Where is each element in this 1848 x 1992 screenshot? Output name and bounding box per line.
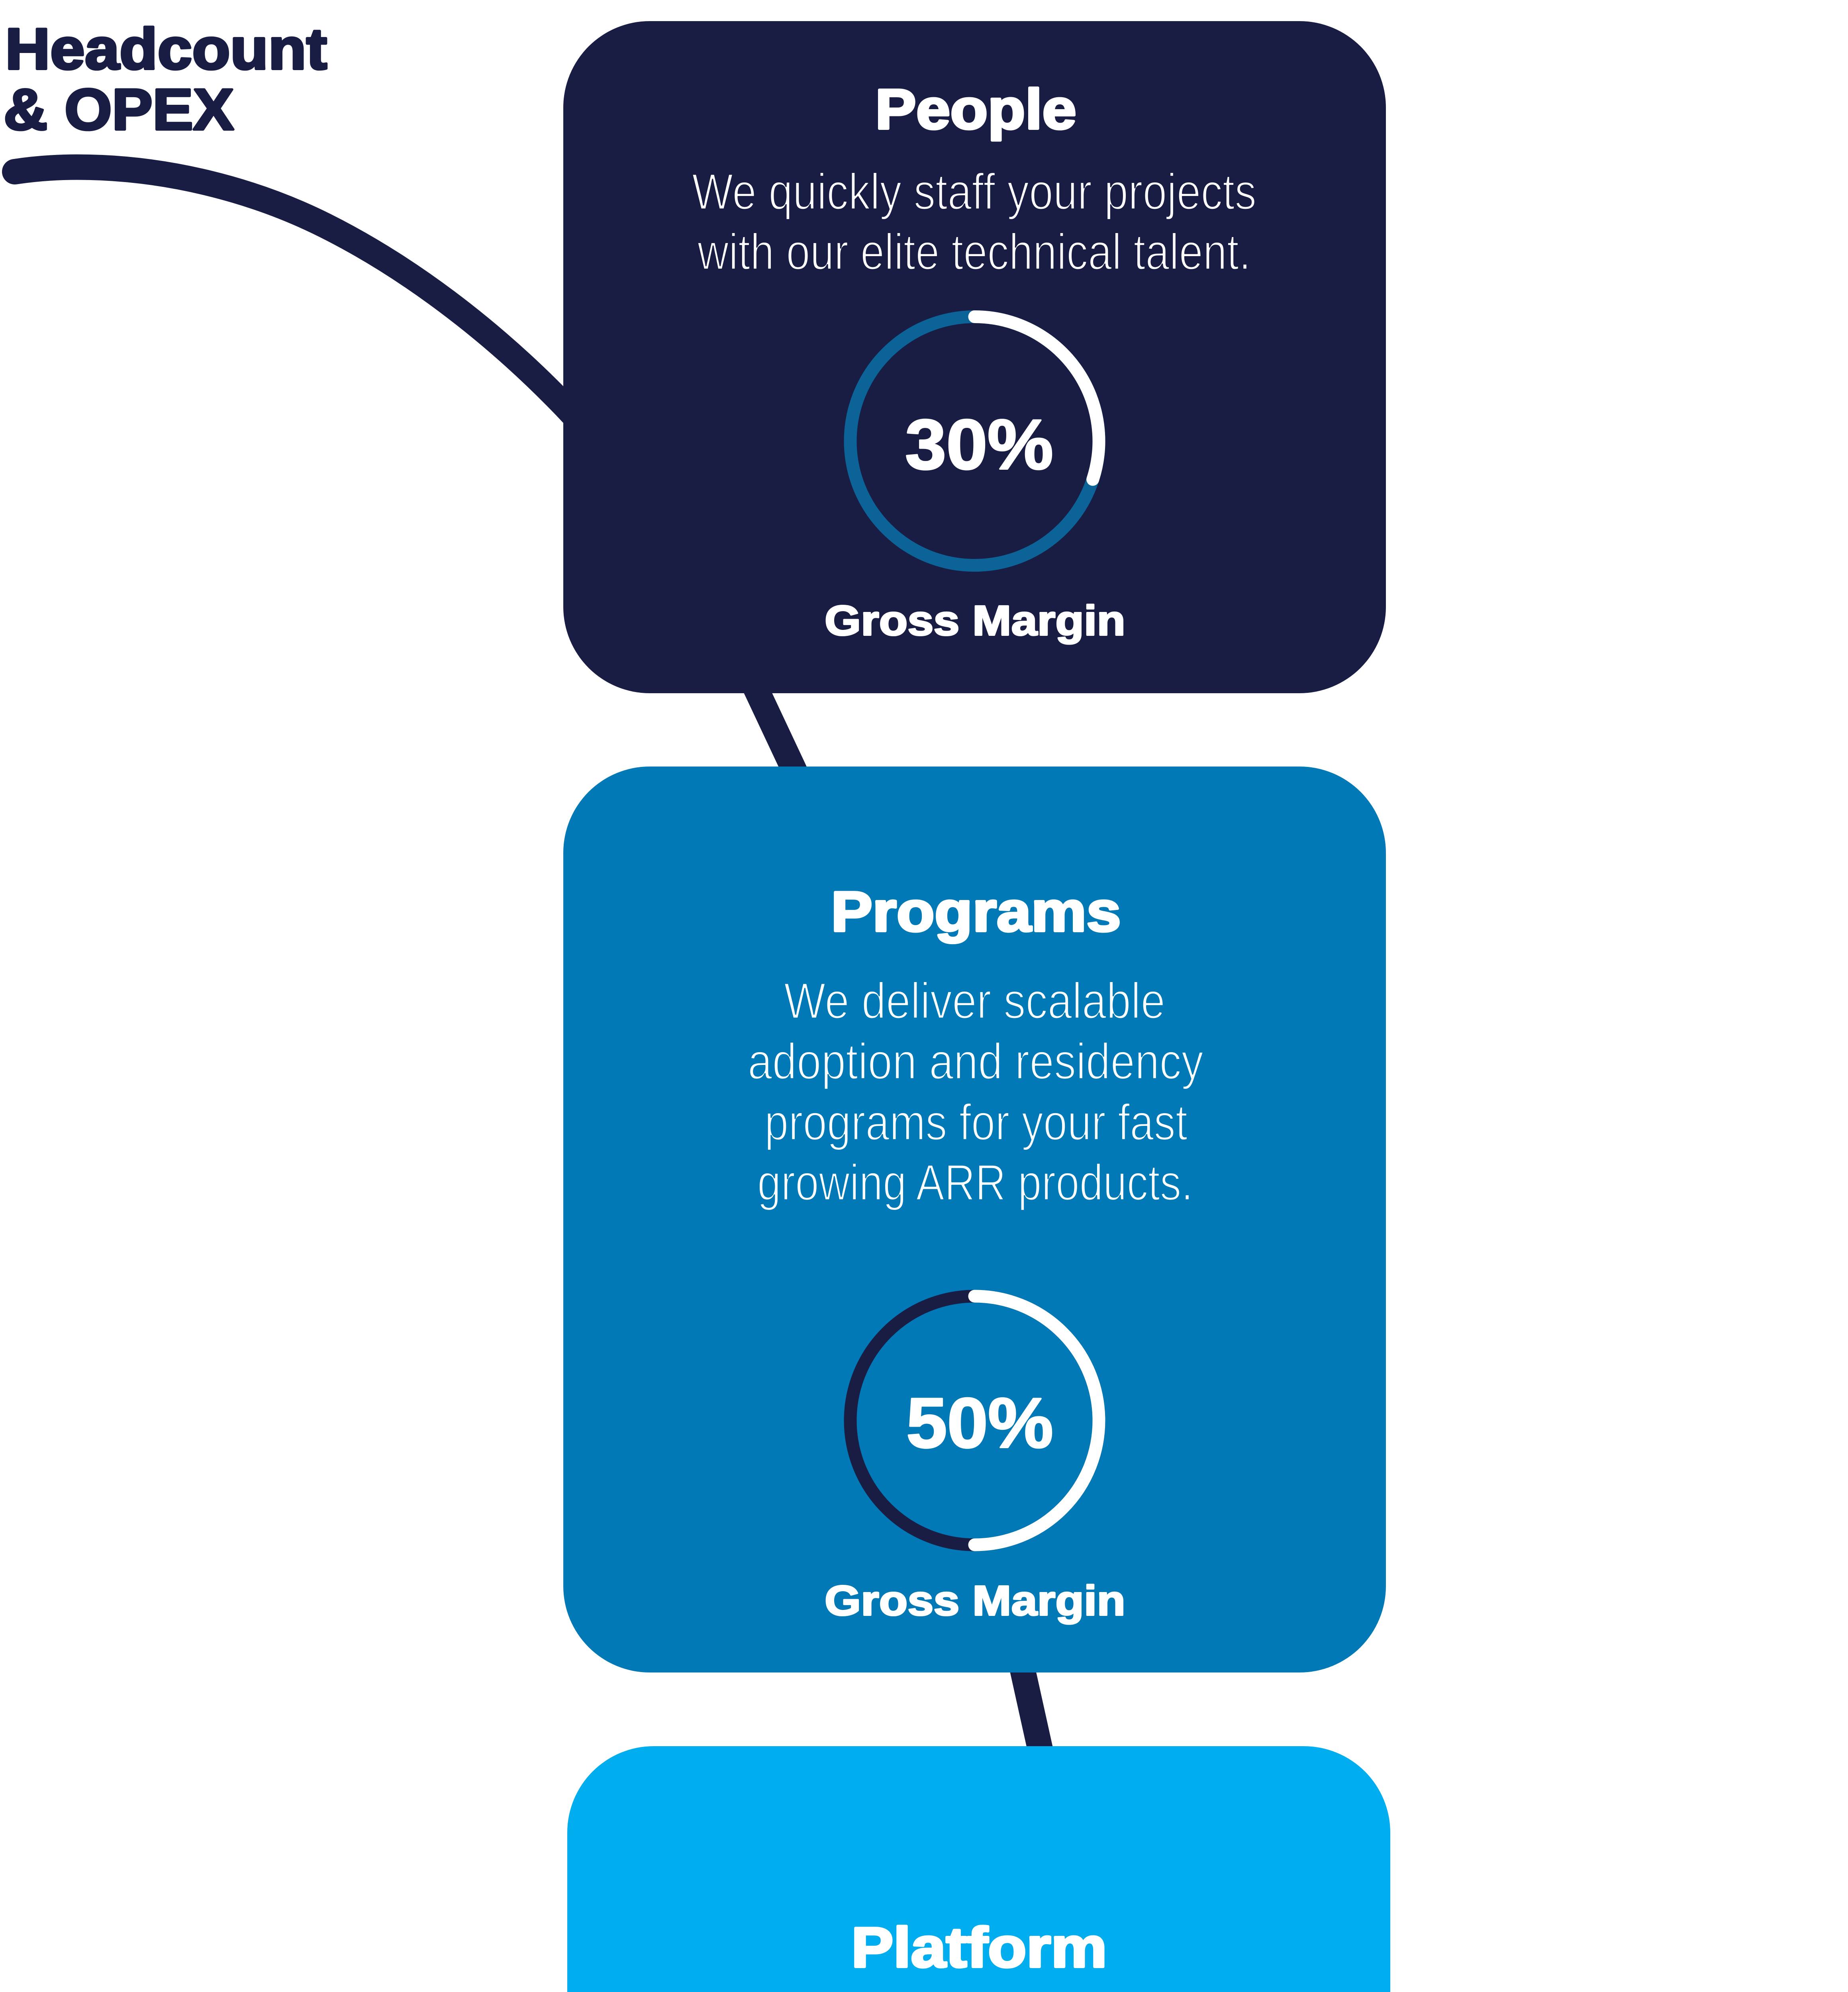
text block: People description [692,163,1256,280]
heading: Headcount & OPEX: Headcount [5,16,327,81]
heading: Programs: Programs [831,880,1121,943]
panel: Programs [563,767,1386,1672]
text block: People description: with our elite technical talent. [697,224,1251,280]
chart: 30% progress ring [850,317,1099,565]
text block: Programs description: programs for your fast [764,1094,1188,1151]
panel: People [563,21,1386,693]
number: 30%: 30% [905,405,1053,484]
label: Gross Margin: Gross Margin [825,1577,1125,1624]
text block: Programs description [748,972,1203,1211]
heading: Headcount & OPEX: & OPEX [4,77,234,142]
number: 50%: 50% [906,1383,1053,1463]
panel: Platform [567,1746,1390,1992]
label: Gross Margin: Gross Margin [825,597,1125,644]
text block: Programs description: adoption and residency [748,1033,1203,1090]
heading: People: People [875,78,1076,141]
heading: Platform: Platform [851,1916,1107,1979]
chart: 50% progress ring [850,1296,1099,1545]
text block: Programs description: growing ARR products. [757,1154,1193,1211]
heading: Headcount & OPEX [4,16,327,142]
text block: Programs description: We deliver scalable [784,972,1165,1029]
text block: People description: We quickly staff your projects [692,163,1256,220]
